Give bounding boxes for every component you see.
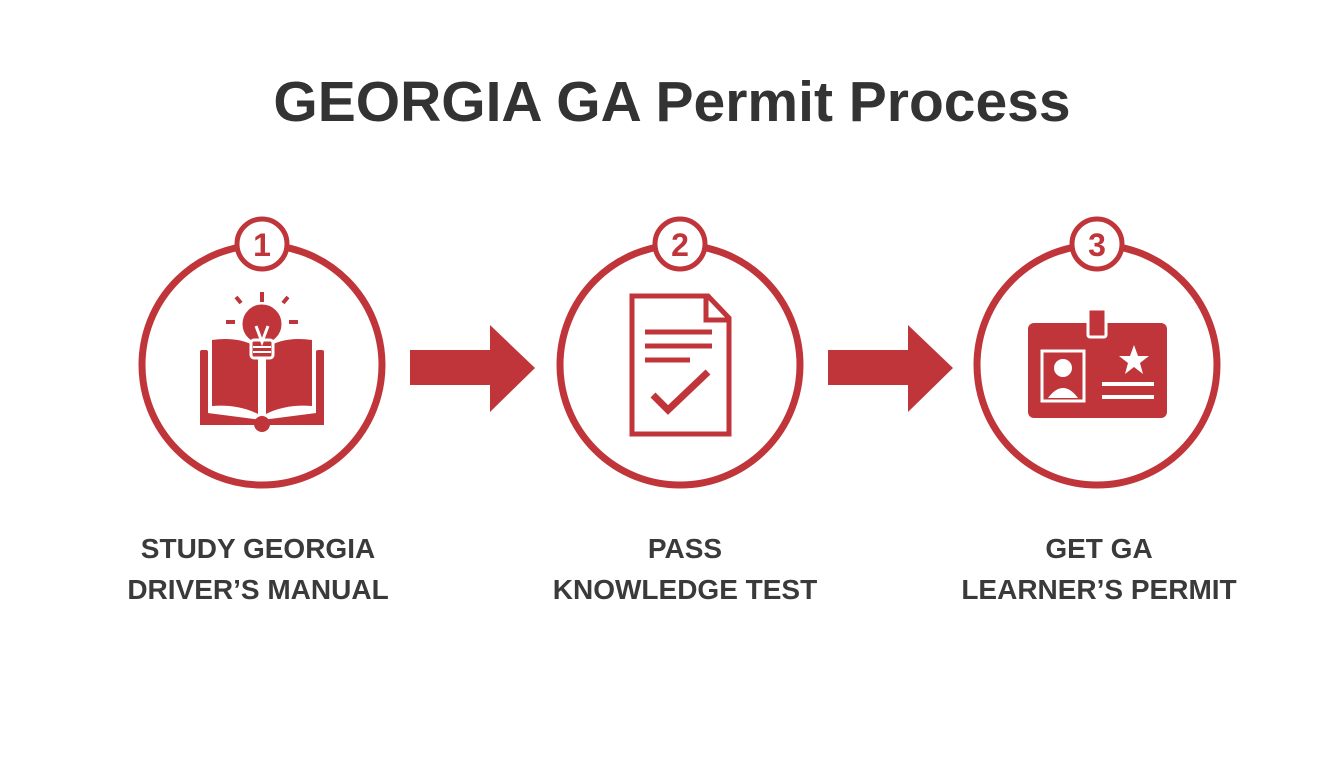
label 3: GET GA <box>1045 533 1153 564</box>
icon: test document with check <box>632 296 729 434</box>
icon: book with lightbulb <box>200 292 324 432</box>
arrow 1 <box>410 325 535 412</box>
step 1 circle <box>142 219 382 485</box>
label 3: LEARNER’S PERMIT <box>961 574 1237 605</box>
step 3 circle <box>977 219 1217 485</box>
badge 2: 2 <box>671 227 689 263</box>
badge 1 <box>237 219 287 269</box>
label 1: DRIVER’S MANUAL <box>127 574 389 605</box>
badge 1: 1 <box>253 227 271 263</box>
icon: ID card <box>1028 309 1167 418</box>
title: GEORGIA GA Permit Process <box>273 70 1071 134</box>
label 3 <box>961 533 1237 605</box>
label 2: KNOWLEDGE TEST <box>553 574 817 605</box>
badge 3 <box>1072 219 1122 269</box>
label 1: STUDY GEORGIA <box>141 533 375 564</box>
step 2 circle <box>560 219 800 485</box>
badge 2 <box>655 219 705 269</box>
label 1 <box>127 533 389 605</box>
arrow 2 <box>828 325 953 412</box>
badge 3: 3 <box>1088 227 1106 263</box>
label 2 <box>553 533 817 605</box>
label 2: PASS <box>648 533 722 564</box>
